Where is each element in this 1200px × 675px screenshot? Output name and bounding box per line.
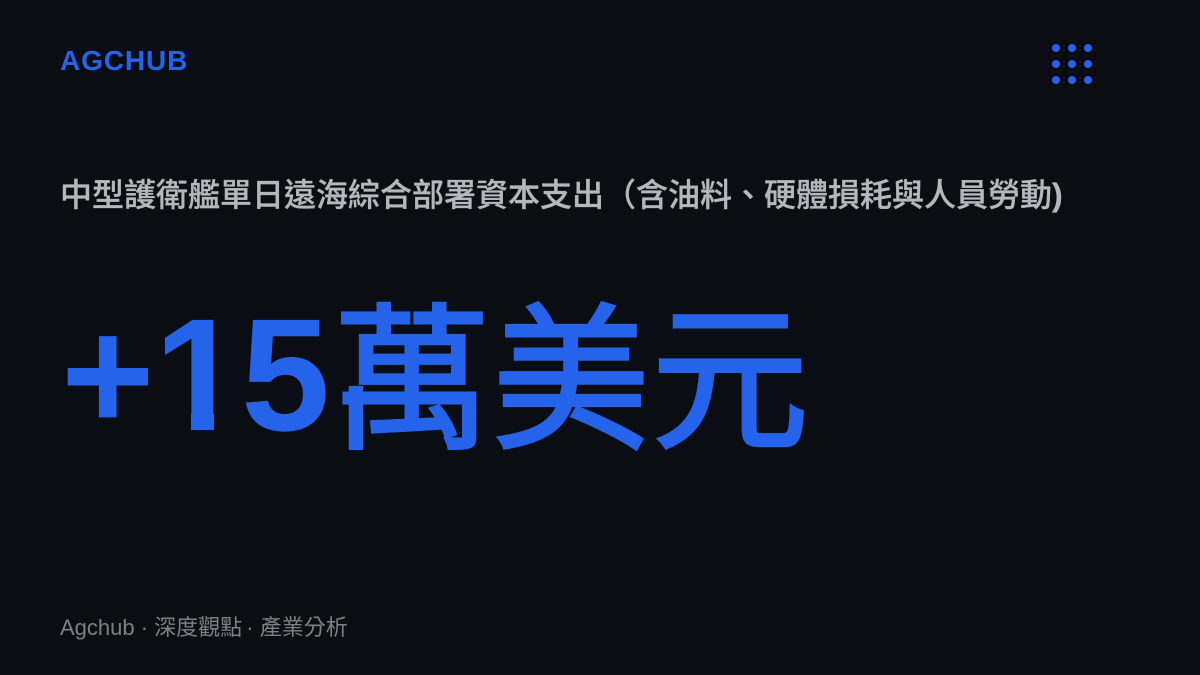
icon: dot grid — [1052, 44, 1092, 84]
brand logo text: AGCHUB — [60, 45, 188, 76]
footer text: Agchub · 深度觀點 · 產業分析 — [60, 615, 348, 640]
main figure: 5 — [241, 285, 330, 464]
main figure: 萬美元 — [333, 294, 810, 470]
main figure: 1 — [154, 285, 243, 464]
main figure: + — [61, 285, 154, 464]
main figure — [61, 285, 810, 470]
subtitle heading: 中型護衛艦單日遠海綜合部署資本支出（含油料、硬體損耗與人員勞動) — [60, 177, 1063, 213]
